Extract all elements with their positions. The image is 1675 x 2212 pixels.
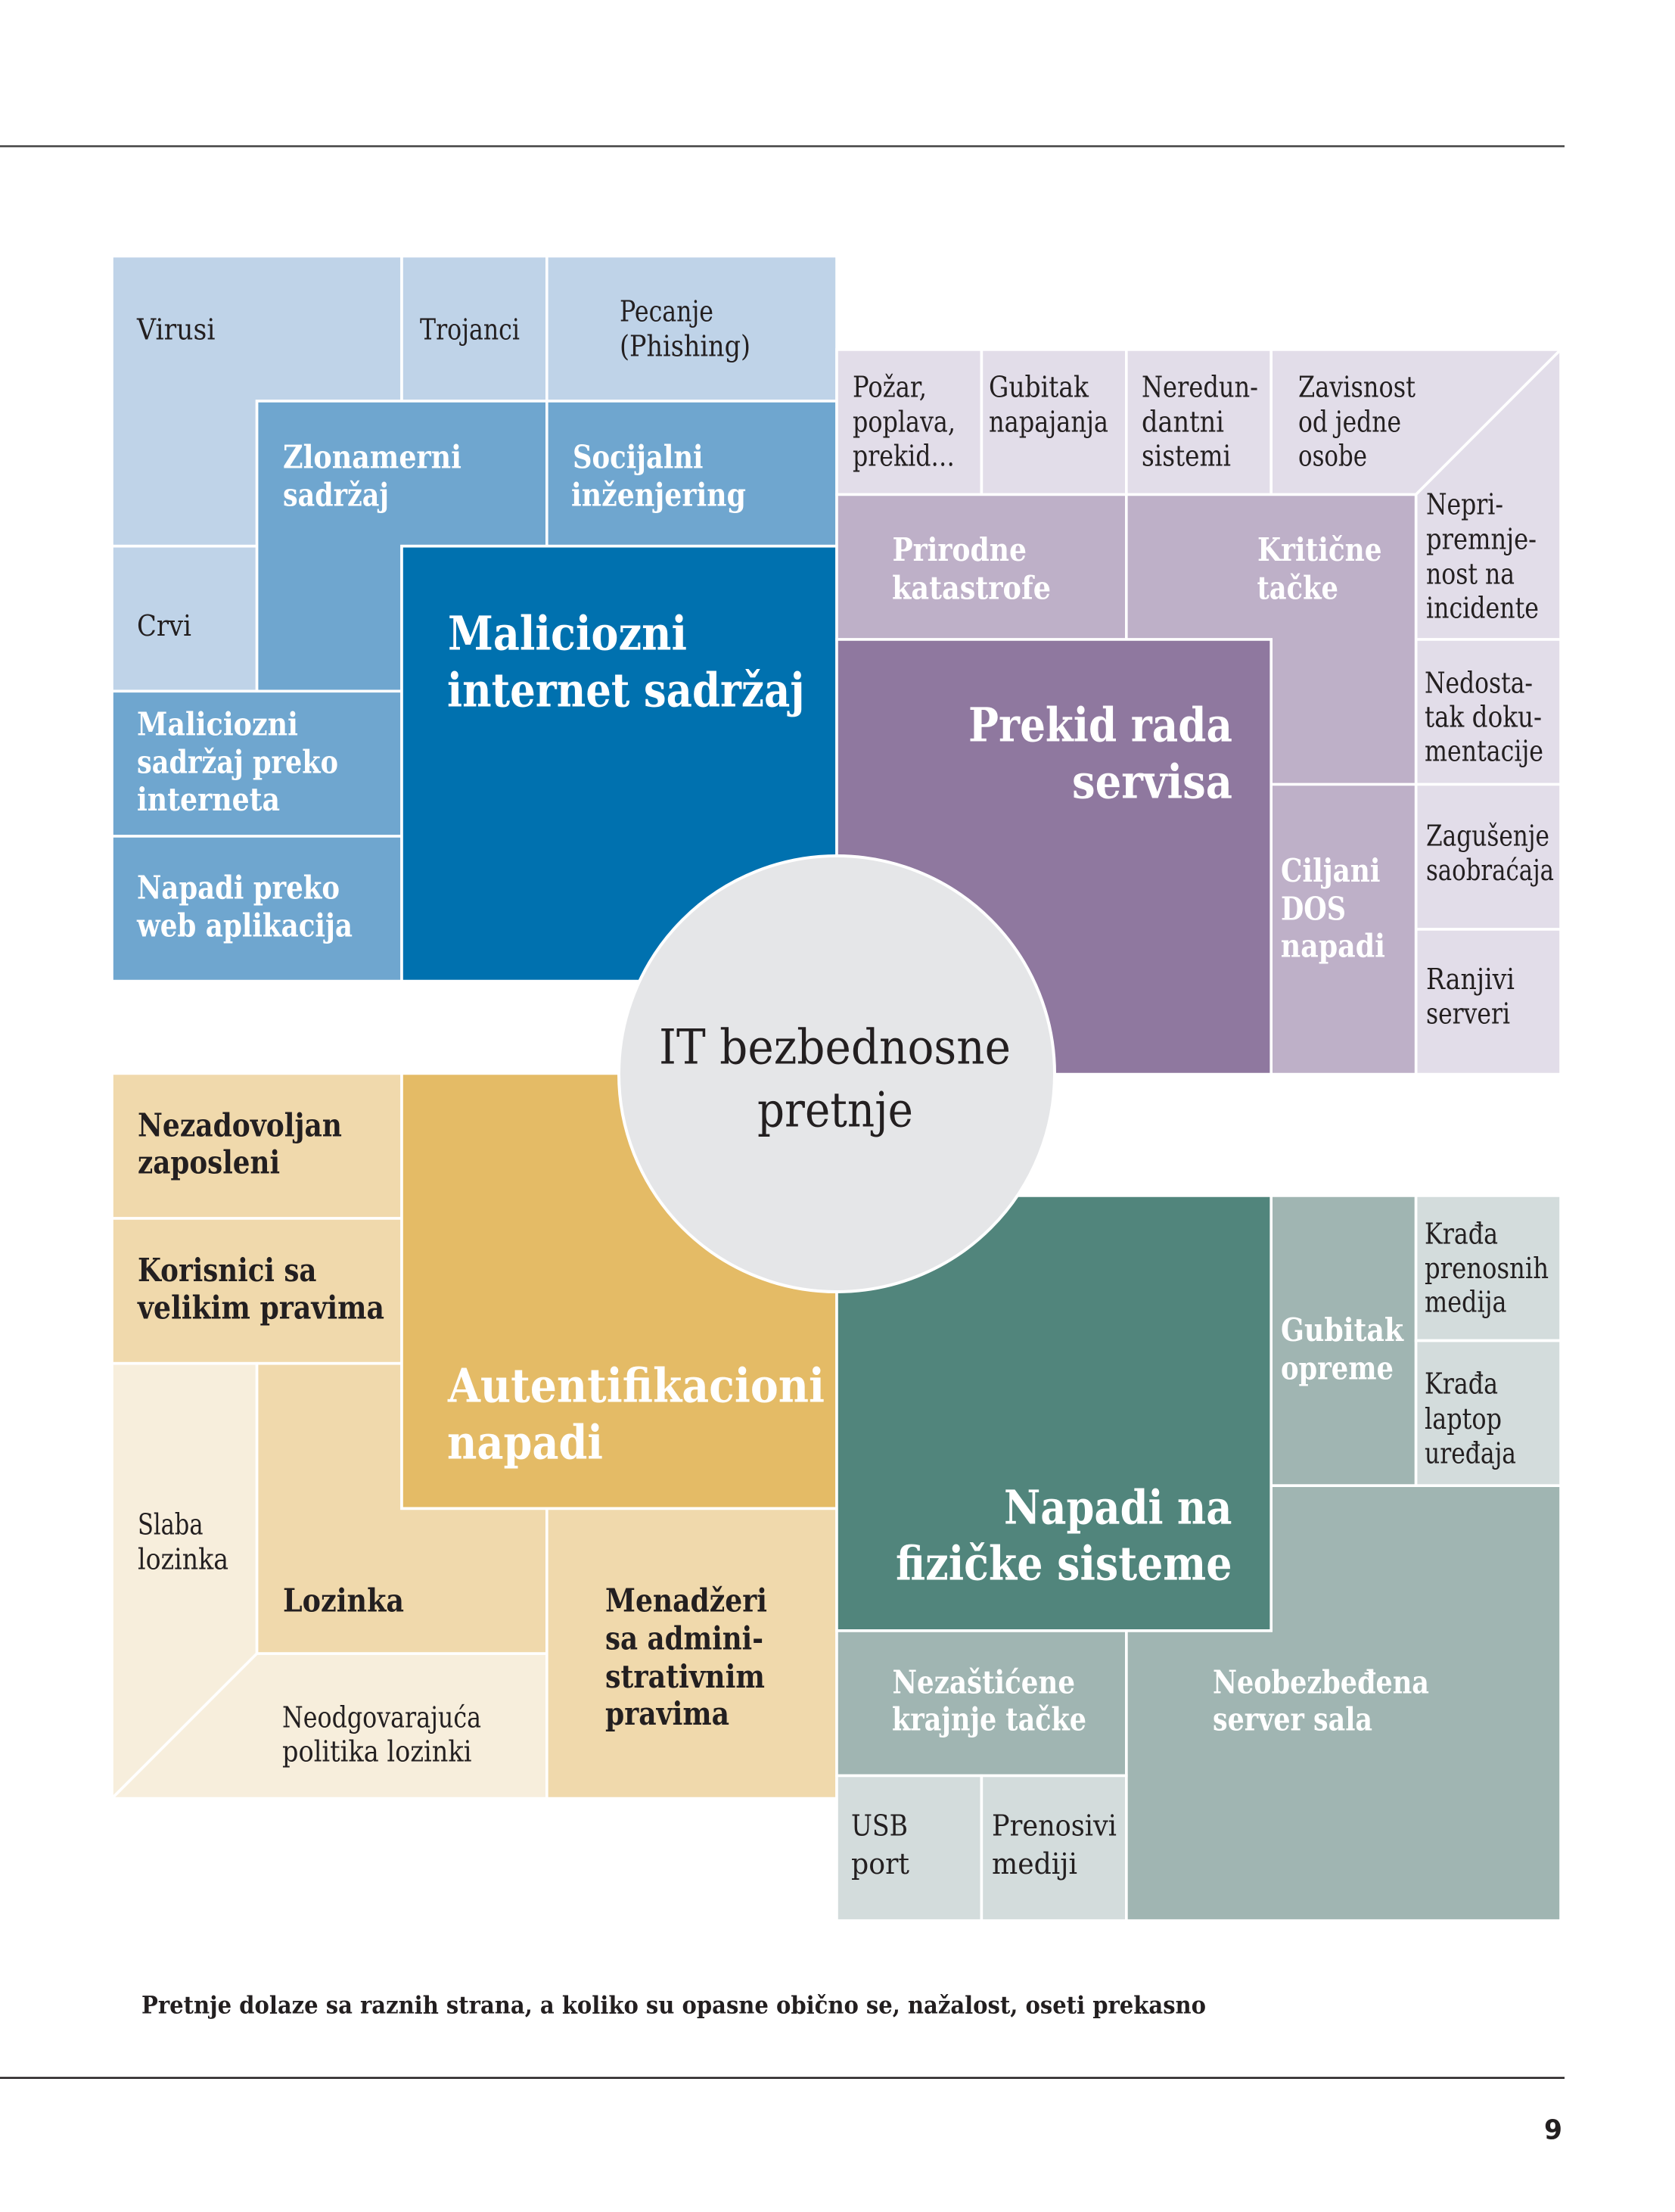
cell: Kritične tačke <box>1127 495 1416 784</box>
cell: Zlonamerni sadržaj <box>257 401 547 691</box>
cell: Zavisnost od jedne osobe: Zavisnost <box>1298 371 1416 404</box>
cell: Trojanci: Trojanci <box>420 313 520 347</box>
cell: Kritične tačke: Kritične <box>1257 531 1381 568</box>
cell: Nedostatak dokumentacije: mentacije <box>1425 734 1543 767</box>
cell: Menadžeri sa administrativnim pravima: strativnim <box>605 1658 765 1695</box>
cell: Požar, poplava, prekid: prekid… <box>853 439 955 472</box>
cell: Krađa laptop uređaja: uređaja <box>1425 1436 1516 1470</box>
cell: Krađa prenosnih medija: prenosnih <box>1425 1252 1549 1285</box>
cell: Maliciozni sadržaj preko interneta: sadržaj preko <box>137 743 338 781</box>
cell: Pecanje: Pecanje <box>620 295 713 328</box>
cell: Pecanje: (Phishing) <box>620 330 750 363</box>
cell: Pecanje <box>547 256 837 401</box>
cell: Maliciozni sadržaj preko interneta: interneta <box>137 781 280 818</box>
cell: Ciljani DOS napadi: DOS <box>1281 890 1346 928</box>
cell: Gubitak napajanja: napajanja <box>989 406 1108 439</box>
cell: Virusi <box>112 256 402 546</box>
cell: Krađa prenosnih medija <box>1416 1196 1561 1341</box>
cell: Nezadovoljan zaposleni: Nezadovoljan <box>138 1106 342 1144</box>
cell: Požar, poplava, prekid <box>837 350 981 495</box>
heading block: Autentifikacioni napadi: Autentifikacioni <box>447 1358 825 1414</box>
cell: Neobezbeđena server sala: server sala <box>1213 1701 1372 1738</box>
heading block: Maliciozni internet sadržaj: Maliciozni <box>448 605 687 661</box>
cell: Ciljani DOS napadi <box>1271 784 1416 1075</box>
cell: Krađa laptop uređaja: laptop <box>1425 1402 1502 1436</box>
cell: Krađa laptop uređaja <box>1416 1341 1561 1486</box>
cell: Nepripremljenost na incidente: nost na <box>1426 557 1515 590</box>
cell: Menadžeri sa administrativnim pravima: sa admini- <box>605 1619 763 1657</box>
cell: Slaba lozinka <box>112 1364 257 1798</box>
cell: Socijalni inženjering: Socijalni <box>573 439 704 475</box>
cell: Zavisnost od jedne osobe: od jedne <box>1298 406 1401 439</box>
cell: Prenosivi mediji: mediji <box>992 1847 1077 1881</box>
cell: Korisnici sa velikim pravima: Korisnici sa <box>138 1252 316 1289</box>
cell: Ciljani DOS napadi: Ciljani <box>1281 852 1380 889</box>
cell: Menadžeri sa administrativnim pravima: pravima <box>605 1695 729 1732</box>
cell: Prenosivi mediji: Prenosivi <box>992 1809 1117 1842</box>
cell: Slaba lozinka: lozinka <box>138 1542 228 1576</box>
cell: Neredundantni sistemi <box>1127 350 1271 495</box>
heading block: Prekid rada servisa: Prekid rada <box>968 698 1232 752</box>
cell: Krađa laptop uređaja: Krađa <box>1425 1367 1498 1400</box>
cell: Ranjivi serveri: Ranjivi <box>1426 963 1515 996</box>
panel: Maliciozni internet sadržaj <box>112 256 837 981</box>
panel: Prekid rada servisa <box>837 350 1561 1075</box>
caption: Pretnje dolaze sa raznih strana, a koliko su opasne obično se, nažalost, oseti prekasno <box>141 1990 1206 2019</box>
heading block: Napadi na fizičke sisteme <box>837 1196 1271 1631</box>
cell: Zavisnost od jedne osobe <box>1271 350 1561 495</box>
heading block: Autentifikacioni napadi <box>402 1073 837 1508</box>
cell: Nezaštićene krajnje tačke <box>837 1631 1127 1775</box>
cell: Nepripremljenost na incidente: premnje- <box>1426 522 1537 555</box>
cell: Maliciozni sadržaj preko interneta: Maliciozni <box>137 705 298 743</box>
cell: Virusi: Virusi <box>136 313 215 347</box>
cell: Lozinka <box>257 1364 547 1654</box>
cell: Nepripremljenost na incidente: Nepri- <box>1426 487 1503 521</box>
cell: Gubitak opreme: opreme <box>1281 1350 1394 1386</box>
central circle: IT bezbednosne pretnje: pretnje <box>757 1082 913 1138</box>
cell: Nezaštićene krajnje tačke: Nezaštićene <box>893 1663 1075 1701</box>
cell: Neodgovarajuća politika lozinki: Neodgovarajuća <box>282 1701 481 1734</box>
cell: Prirodne katastrofe <box>837 495 1127 639</box>
cell: Zavisnost od jedne osobe: osobe <box>1298 439 1367 472</box>
cell: Nedostatak dokumentacije <box>1416 639 1561 784</box>
central circle: IT bezbednosne pretnje <box>619 856 1055 1292</box>
cell: Maliciozni sadržaj preko interneta <box>112 691 402 836</box>
cell: Crvi: Crvi <box>137 609 191 642</box>
cell: Korisnici sa velikim pravima: velikim pravima <box>137 1290 384 1326</box>
cell: Prirodne katastrofe: katastrofe <box>892 569 1051 607</box>
cell: Požar, poplava, prekid: Požar, <box>853 371 927 404</box>
cell: Slaba lozinka: Slaba <box>138 1507 203 1541</box>
cell: Zagušenje saobraćaja: saobraćaja <box>1426 854 1554 887</box>
cell: Zagušenje saobraćaja: Zagušenje <box>1426 819 1549 852</box>
cell: Lozinka: Lozinka <box>283 1582 404 1619</box>
cell: Neredundantni sistemi: Neredun- <box>1142 371 1258 404</box>
cell: Neodgovarajuća politika lozinki: politika lozinki <box>282 1734 472 1768</box>
cell: Zlonamerni sadržaj: Zlonamerni <box>283 439 461 475</box>
cell: Zlonamerni sadržaj: sadržaj <box>283 477 389 513</box>
panel: Napadi na fizičke sisteme <box>837 1196 1561 1921</box>
cell: Socijalni inženjering <box>547 401 837 546</box>
page number: 9 <box>1544 2114 1562 2146</box>
cell: Korisnici sa velikim pravima <box>112 1218 402 1364</box>
cell: Neredundantni sistemi: sistemi <box>1142 439 1231 472</box>
cell: Napadi preko web aplikacija <box>112 836 402 981</box>
cell: Kritične tačke: tačke <box>1257 569 1338 607</box>
cell: Neodgovarajuća politika lozinki <box>112 1654 547 1798</box>
cell: Trojanci <box>402 256 547 401</box>
heading block: Prekid rada servisa: servisa <box>1072 754 1232 810</box>
cell: USB port <box>837 1775 981 1921</box>
heading block: Autentifikacioni napadi: napadi <box>447 1415 603 1470</box>
heading block: Napadi na fizičke sisteme: fizičke sisteme <box>896 1536 1232 1591</box>
cell: Gubitak opreme: Gubitak <box>1281 1311 1404 1349</box>
cell: Neredundantni sistemi: dantni <box>1142 406 1224 439</box>
heading block: Prekid rada servisa <box>837 639 1271 1075</box>
heading block: Maliciozni internet sadržaj: internet sadržaj <box>447 663 805 717</box>
cell: Menadžeri sa administrativnim pravima: Menadžeri <box>605 1582 767 1619</box>
cell: Nedostatak dokumentacije: tak doku- <box>1425 701 1542 734</box>
cell: Ciljani DOS napadi: napadi <box>1281 928 1385 964</box>
cell: Nepripremljenost na incidente <box>1416 350 1561 639</box>
cell: Menadžeri sa administrativnim pravima <box>547 1508 837 1798</box>
cell: Prenosivi mediji <box>981 1775 1127 1921</box>
cell: Krađa prenosnih medija: Krađa <box>1425 1217 1498 1250</box>
cell: Socijalni inženjering: inženjering <box>571 477 746 513</box>
central circle: IT bezbednosne pretnje: IT bezbednosne <box>659 1020 1011 1076</box>
cell: Napadi preko web aplikacija: web aplikacija <box>136 907 353 944</box>
cell: Požar, poplava, prekid: poplava, <box>853 406 956 439</box>
cell: Nepripremljenost na incidente: incidente <box>1426 592 1539 625</box>
cell: Krađa prenosnih medija: medija <box>1425 1285 1507 1318</box>
cell: Nezadovoljan zaposleni <box>112 1073 402 1218</box>
cell: Gubitak napajanja: Gubitak <box>989 371 1089 404</box>
cell: Prirodne katastrofe: Prirodne <box>893 531 1027 568</box>
cell: Gubitak opreme <box>1271 1196 1416 1486</box>
cell: Zagušenje saobraćaja <box>1416 784 1561 929</box>
cell: Nezaštićene krajnje tačke: krajnje tačke <box>892 1701 1086 1738</box>
cell: Nezadovoljan zaposleni: zaposleni <box>138 1144 280 1181</box>
heading block: Napadi na fizičke sisteme: Napadi na <box>1004 1480 1232 1535</box>
heading block: Maliciozni internet sadržaj <box>402 546 837 981</box>
cell: Neobezbeđena server sala: Neobezbeđena <box>1213 1663 1429 1701</box>
cell: Crvi <box>112 546 257 691</box>
cell: Neobezbeđena server sala <box>1127 1486 1561 1921</box>
cell: USB port: USB <box>851 1809 908 1842</box>
cell: Ranjivi serveri: serveri <box>1426 997 1510 1031</box>
cell: USB port: port <box>851 1847 909 1881</box>
cell: Nedostatak dokumentacije: Nedosta- <box>1425 666 1533 699</box>
cell: Ranjivi serveri <box>1416 929 1561 1075</box>
cell: Gubitak napajanja <box>981 350 1127 495</box>
panel: Autentifikacioni napadi <box>112 1073 837 1798</box>
cell: Napadi preko web aplikacija: Napadi preko <box>137 869 340 907</box>
